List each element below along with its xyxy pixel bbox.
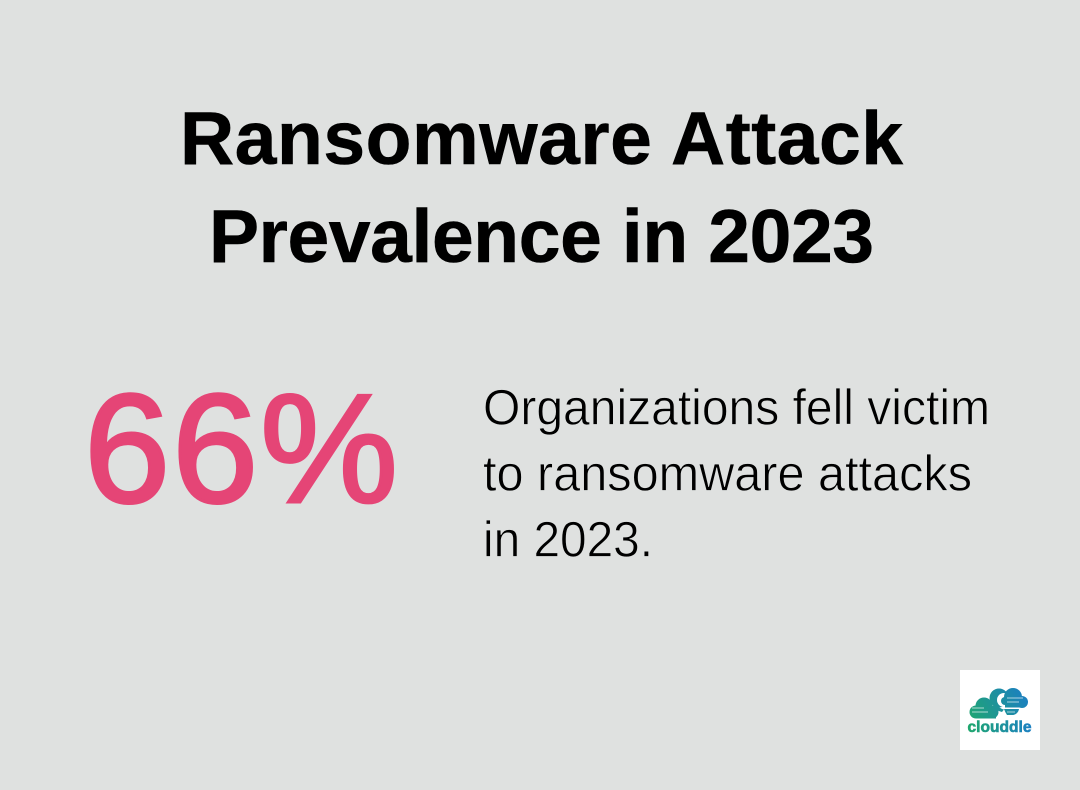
logo wordmark: clouddle xyxy=(968,719,1032,736)
icon: middle cloud arc xyxy=(990,688,1011,712)
statistic: 66%: 66% xyxy=(84,362,398,535)
title: Prevalence in 2023 xyxy=(209,194,874,278)
description text xyxy=(483,380,990,568)
title: Ransomware Attack xyxy=(180,96,903,180)
icon: left cloud xyxy=(970,698,998,718)
icon: cloud circuit lines xyxy=(972,698,1023,712)
title xyxy=(180,96,903,278)
description text: to ransomware attacks xyxy=(483,446,972,502)
logo: clouddle xyxy=(960,670,1040,750)
description text: Organizations fell victim xyxy=(483,380,990,436)
icon: right cloud xyxy=(1001,688,1028,715)
description text: in 2023. xyxy=(483,512,653,568)
